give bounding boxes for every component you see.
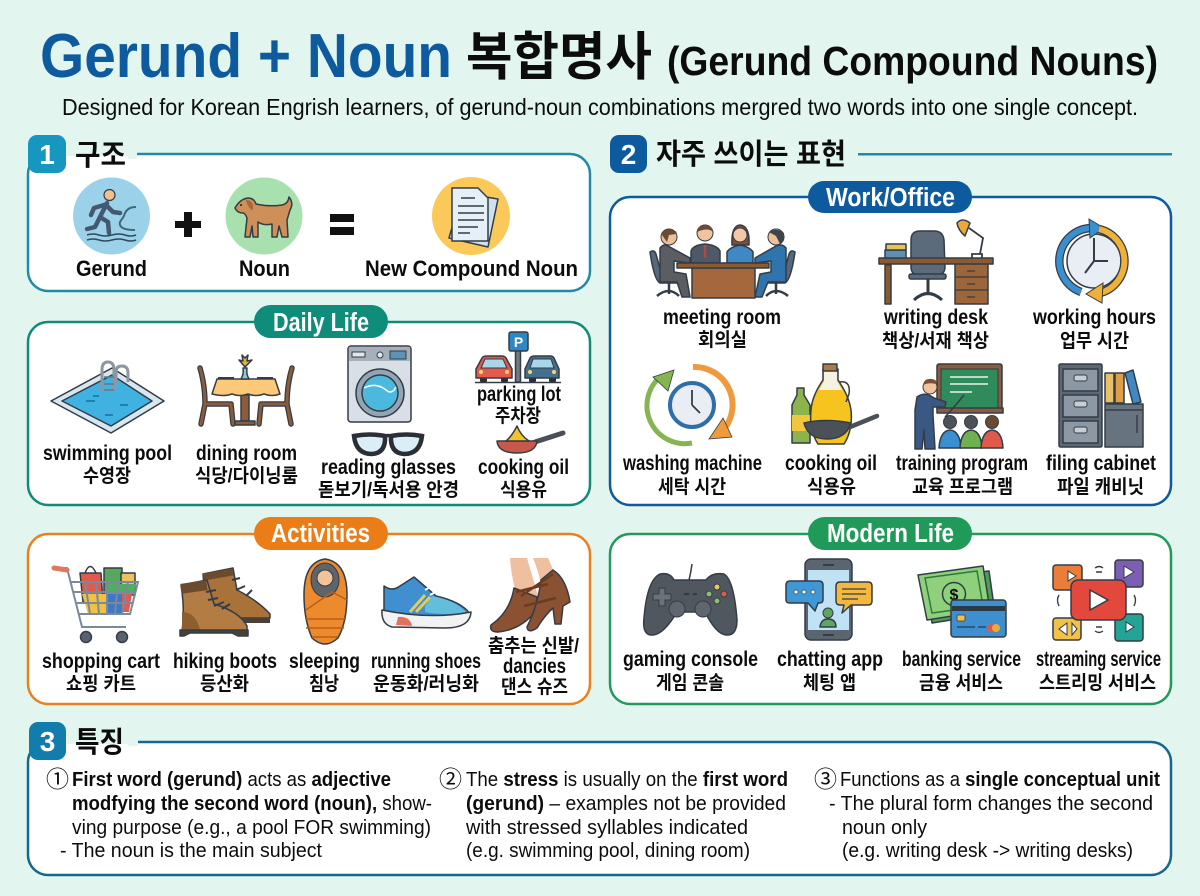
section badge 3: 3 [40,726,55,757]
icon: noun dog [226,178,302,254]
label: 체팅 앱: 체팅 앱 [803,672,856,694]
label: washing machine: washing machine [622,452,762,475]
item: cooking oil bottles [785,364,877,498]
label: gaming console: gaming console [623,648,758,671]
item: dance shoes [488,558,580,698]
item: reading glasses [318,346,459,501]
label: 돋보기/독서용 안경: 돋보기/독서용 안경 [318,479,459,501]
label: working hours: working hours [1032,306,1156,329]
text block: point 3: - The plural form changes the second [829,792,1153,815]
label: hiking boots: hiking boots [173,650,277,673]
text block: point 2: The stress is usually on the first word [466,768,788,791]
section badge 1 [28,135,66,173]
label: writing desk: writing desk [883,306,988,329]
label: 수영장: 수영장 [83,465,131,487]
item: sleeping bag [289,559,360,695]
icon: washing machine [348,346,411,422]
label: 쇼핑 카트: 쇼핑 카트 [66,673,136,695]
title: (Gerund Compound Nouns) [667,38,1158,84]
text block: point 3: ③ [814,760,837,794]
item: parking lot [475,332,561,427]
icon: equals [330,214,354,235]
item: working hours [1032,219,1156,352]
heading: features: 특징 [75,726,124,759]
icon: shopping cart [54,566,138,642]
text block: point 3: Functions as a single conceptual unit [840,768,1160,791]
icon: running shoe [382,577,471,628]
text block: point 1: ① [46,760,69,794]
item: training program [896,364,1028,498]
subtitle: Designed for Korean Engrish learners, of gerund-noun combinations mergred two words into one single concept. [62,94,1138,120]
label: dancies: dancies [503,655,566,678]
label: cooking oil: cooking oil [785,452,877,475]
panel: activities [28,517,590,704]
icon: filing cabinet [1059,364,1143,447]
icon: hiking boots [180,568,270,636]
label: 식용유: 식용유 [500,479,547,501]
text block: point 3 [814,760,1160,862]
label: 세탁 시간: 세탁 시간 [658,476,726,498]
label: 책상/서재 책상: 책상/서재 책상 [882,330,989,352]
text block: point 2: ② [439,760,462,794]
panel: modern life [610,517,1171,704]
icon: clock with cycle arrows [647,367,733,444]
label: parking lot: parking lot [477,383,561,406]
item: dining room [195,355,298,487]
heading: structure: 구조 [75,140,126,172]
icon: sleeping bag [304,559,347,644]
label: swimming pool: swimming pool [43,442,172,465]
label: sleeping: sleeping [289,650,360,673]
icon: dance shoes [491,558,570,632]
item: writing desk [879,220,993,352]
title [40,22,1158,91]
label: noun: Noun [239,256,290,281]
text block: point 3: noun only [842,816,928,839]
label: filing cabinet: filing cabinet [1046,452,1156,475]
item: filing cabinet [1046,364,1156,498]
label: cooking oil: cooking oil [478,456,569,479]
label: 식용유: 식용유 [807,476,856,498]
icon: gerund [73,178,150,254]
label: 식당/다이닝룸: 식당/다이닝룸 [195,465,298,487]
title: Gerund + Noun [40,22,452,91]
text block: point 1: ving purpose (e.g., a pool FOR swimming) [72,816,431,839]
item: washing machine [622,367,762,498]
icon: documents [432,177,510,255]
panel: work/office [610,181,1171,505]
item: meeting room [650,225,795,351]
item: banking service [902,566,1021,694]
text block: point 2: with stressed syllables indicated [465,816,748,839]
item: swimming pool [43,362,172,487]
icon: phone with chat bubbles [786,559,872,640]
panel: features [28,722,1171,875]
pill: daily life: Daily Life [273,309,369,337]
title: 복합명사 [466,29,652,87]
label: reading glasses: reading glasses [321,456,456,479]
section header 2 [610,135,1172,173]
label: 파일 캐비닛: 파일 캐비닛 [1057,476,1144,498]
pill: work/office: Work/Office [826,184,955,212]
icon: pool [51,362,164,433]
label: shopping cart: shopping cart [42,650,160,673]
section header 2: 자주 쓰이는 표현 [656,138,846,171]
section header 2: 2 [621,139,636,170]
label: 댄스 슈즈: 댄스 슈즈 [501,676,568,698]
item: cooking oil [478,426,569,501]
text block: point 1: First word (gerund) acts as adjective [72,768,391,791]
text block: point 2: (gerund) – examples not be provided [466,792,786,815]
label: 춤추는 신발/: 춤추는 신발/ [488,635,580,657]
label: 업무 시간: 업무 시간 [1060,330,1129,352]
icon: parking sign and cars: P [514,334,523,350]
item: running shoes [371,577,481,695]
label: 교육 프로그램: 교육 프로그램 [912,476,1013,498]
text block: point 3: (e.g. writing desk -> writing desks) [842,839,1133,862]
label: banking service: banking service [902,648,1021,671]
label: dining room: dining room [196,442,297,465]
item: shopping cart [42,566,160,695]
label: 회의실: 회의실 [698,329,747,351]
label: 침낭: 침낭 [309,673,339,695]
label: 게임 콘솔: 게임 콘솔 [656,672,724,694]
label: 스트리밍 서비스: 스트리밍 서비스 [1039,672,1156,694]
panel: structure [28,135,590,291]
text block: point 1 [46,760,432,862]
panel: daily life [28,305,590,505]
icon: game controller [644,564,737,635]
item: gaming console [623,564,758,694]
label: 등산화: 등산화 [200,673,249,695]
icon: clock with arrows [1059,219,1124,303]
pill: activities: Activities [271,520,370,548]
icon: dining table [200,355,292,425]
label: chatting app: chatting app [777,648,883,671]
label: meeting room: meeting room [663,306,781,329]
pill: modern life: Modern Life [827,520,954,548]
icon: frying pan with oil [497,426,563,453]
label: gerund: Gerund [76,256,147,281]
item: streaming service [1036,560,1161,694]
section badge 1: 1 [39,139,55,170]
icon: writing desk [879,220,993,304]
icon: teacher with chalkboard [915,364,1003,449]
label: 금융 서비스: 금융 서비스 [919,672,1003,694]
label: new compound noun: New Compound Noun [365,256,578,281]
icon: streaming media tiles [1053,560,1143,641]
text block: point 1: - The noun is the main subject [60,839,322,862]
icon: plus [175,212,201,237]
label: running shoes: running shoes [371,650,481,673]
text block: point 2 [439,760,788,862]
label: training program: training program [896,452,1028,475]
icon: money and credit card: $ [950,587,959,604]
icon: glasses [354,434,422,454]
label: 운동화/러닝화: 운동화/러닝화 [373,673,479,695]
item: hiking boots [173,568,277,695]
item: chatting app [777,559,883,694]
icon: oil bottles and pan [792,364,877,444]
label: 주차장: 주차장 [495,405,541,427]
text block: point 1: modfying the second word (noun), show- [72,792,432,815]
section badge 3 [29,722,66,760]
icon: meeting room [650,225,795,298]
text block: point 2: (e.g. swimming pool, dining room) [466,839,750,862]
